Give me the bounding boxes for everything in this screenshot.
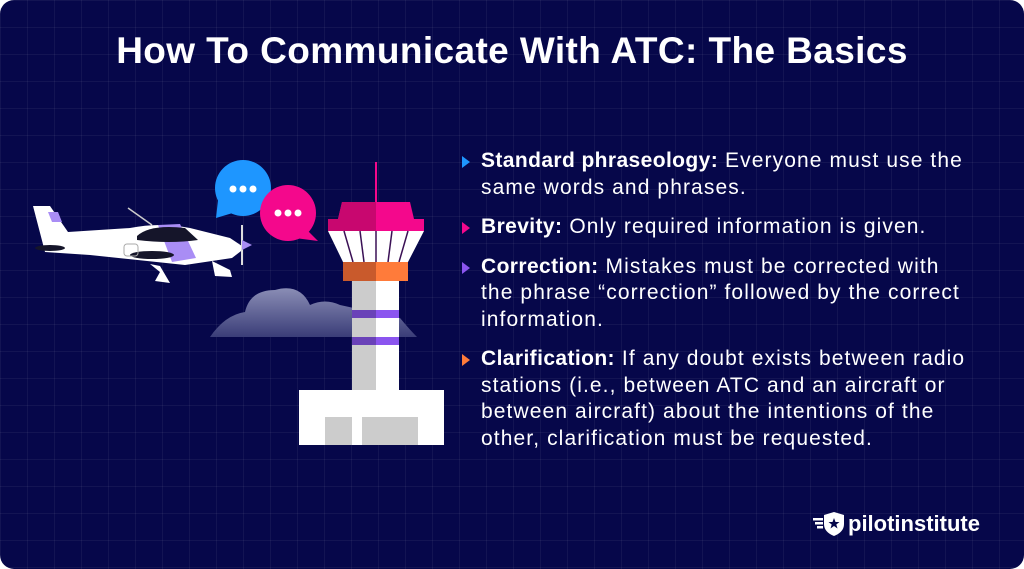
cloud [210, 288, 417, 337]
icon: pink speech bubble [260, 185, 318, 241]
item: correction [462, 254, 960, 330]
item: clarification: between aircraft) about the intentions of the [481, 400, 934, 423]
item: standard phraseology: Standard phraseology: Everyone must use the [481, 149, 963, 172]
item: correction: information. [481, 308, 604, 330]
item: standard phraseology [462, 149, 963, 198]
icon: control tower [299, 162, 444, 445]
item: correction: Correction: Mistakes must be corrected with [481, 254, 940, 278]
illustration: plane and tower [33, 160, 444, 445]
item: clarification: stations (i.e., between ATC and an aircraft or [481, 374, 946, 396]
icon: airplane [33, 206, 252, 283]
icon: blue speech bubble [215, 160, 271, 218]
item: brevity: Brevity: Only required information is given. [481, 215, 926, 238]
bullet list [462, 149, 965, 450]
item: clarification: Clarification: If any doubt exists between radio [481, 347, 965, 370]
item: standard phraseology: same words and phrases. [481, 176, 747, 198]
item: clarification [462, 347, 965, 450]
item: correction: the phrase “correction” followed by the correct [481, 281, 960, 304]
title: How To Communicate With ATC: The Basics [116, 30, 908, 71]
logo: pilotinstitute: pilotinstitute [848, 511, 980, 536]
item: clarification: other, clarification must be requested. [481, 426, 873, 450]
